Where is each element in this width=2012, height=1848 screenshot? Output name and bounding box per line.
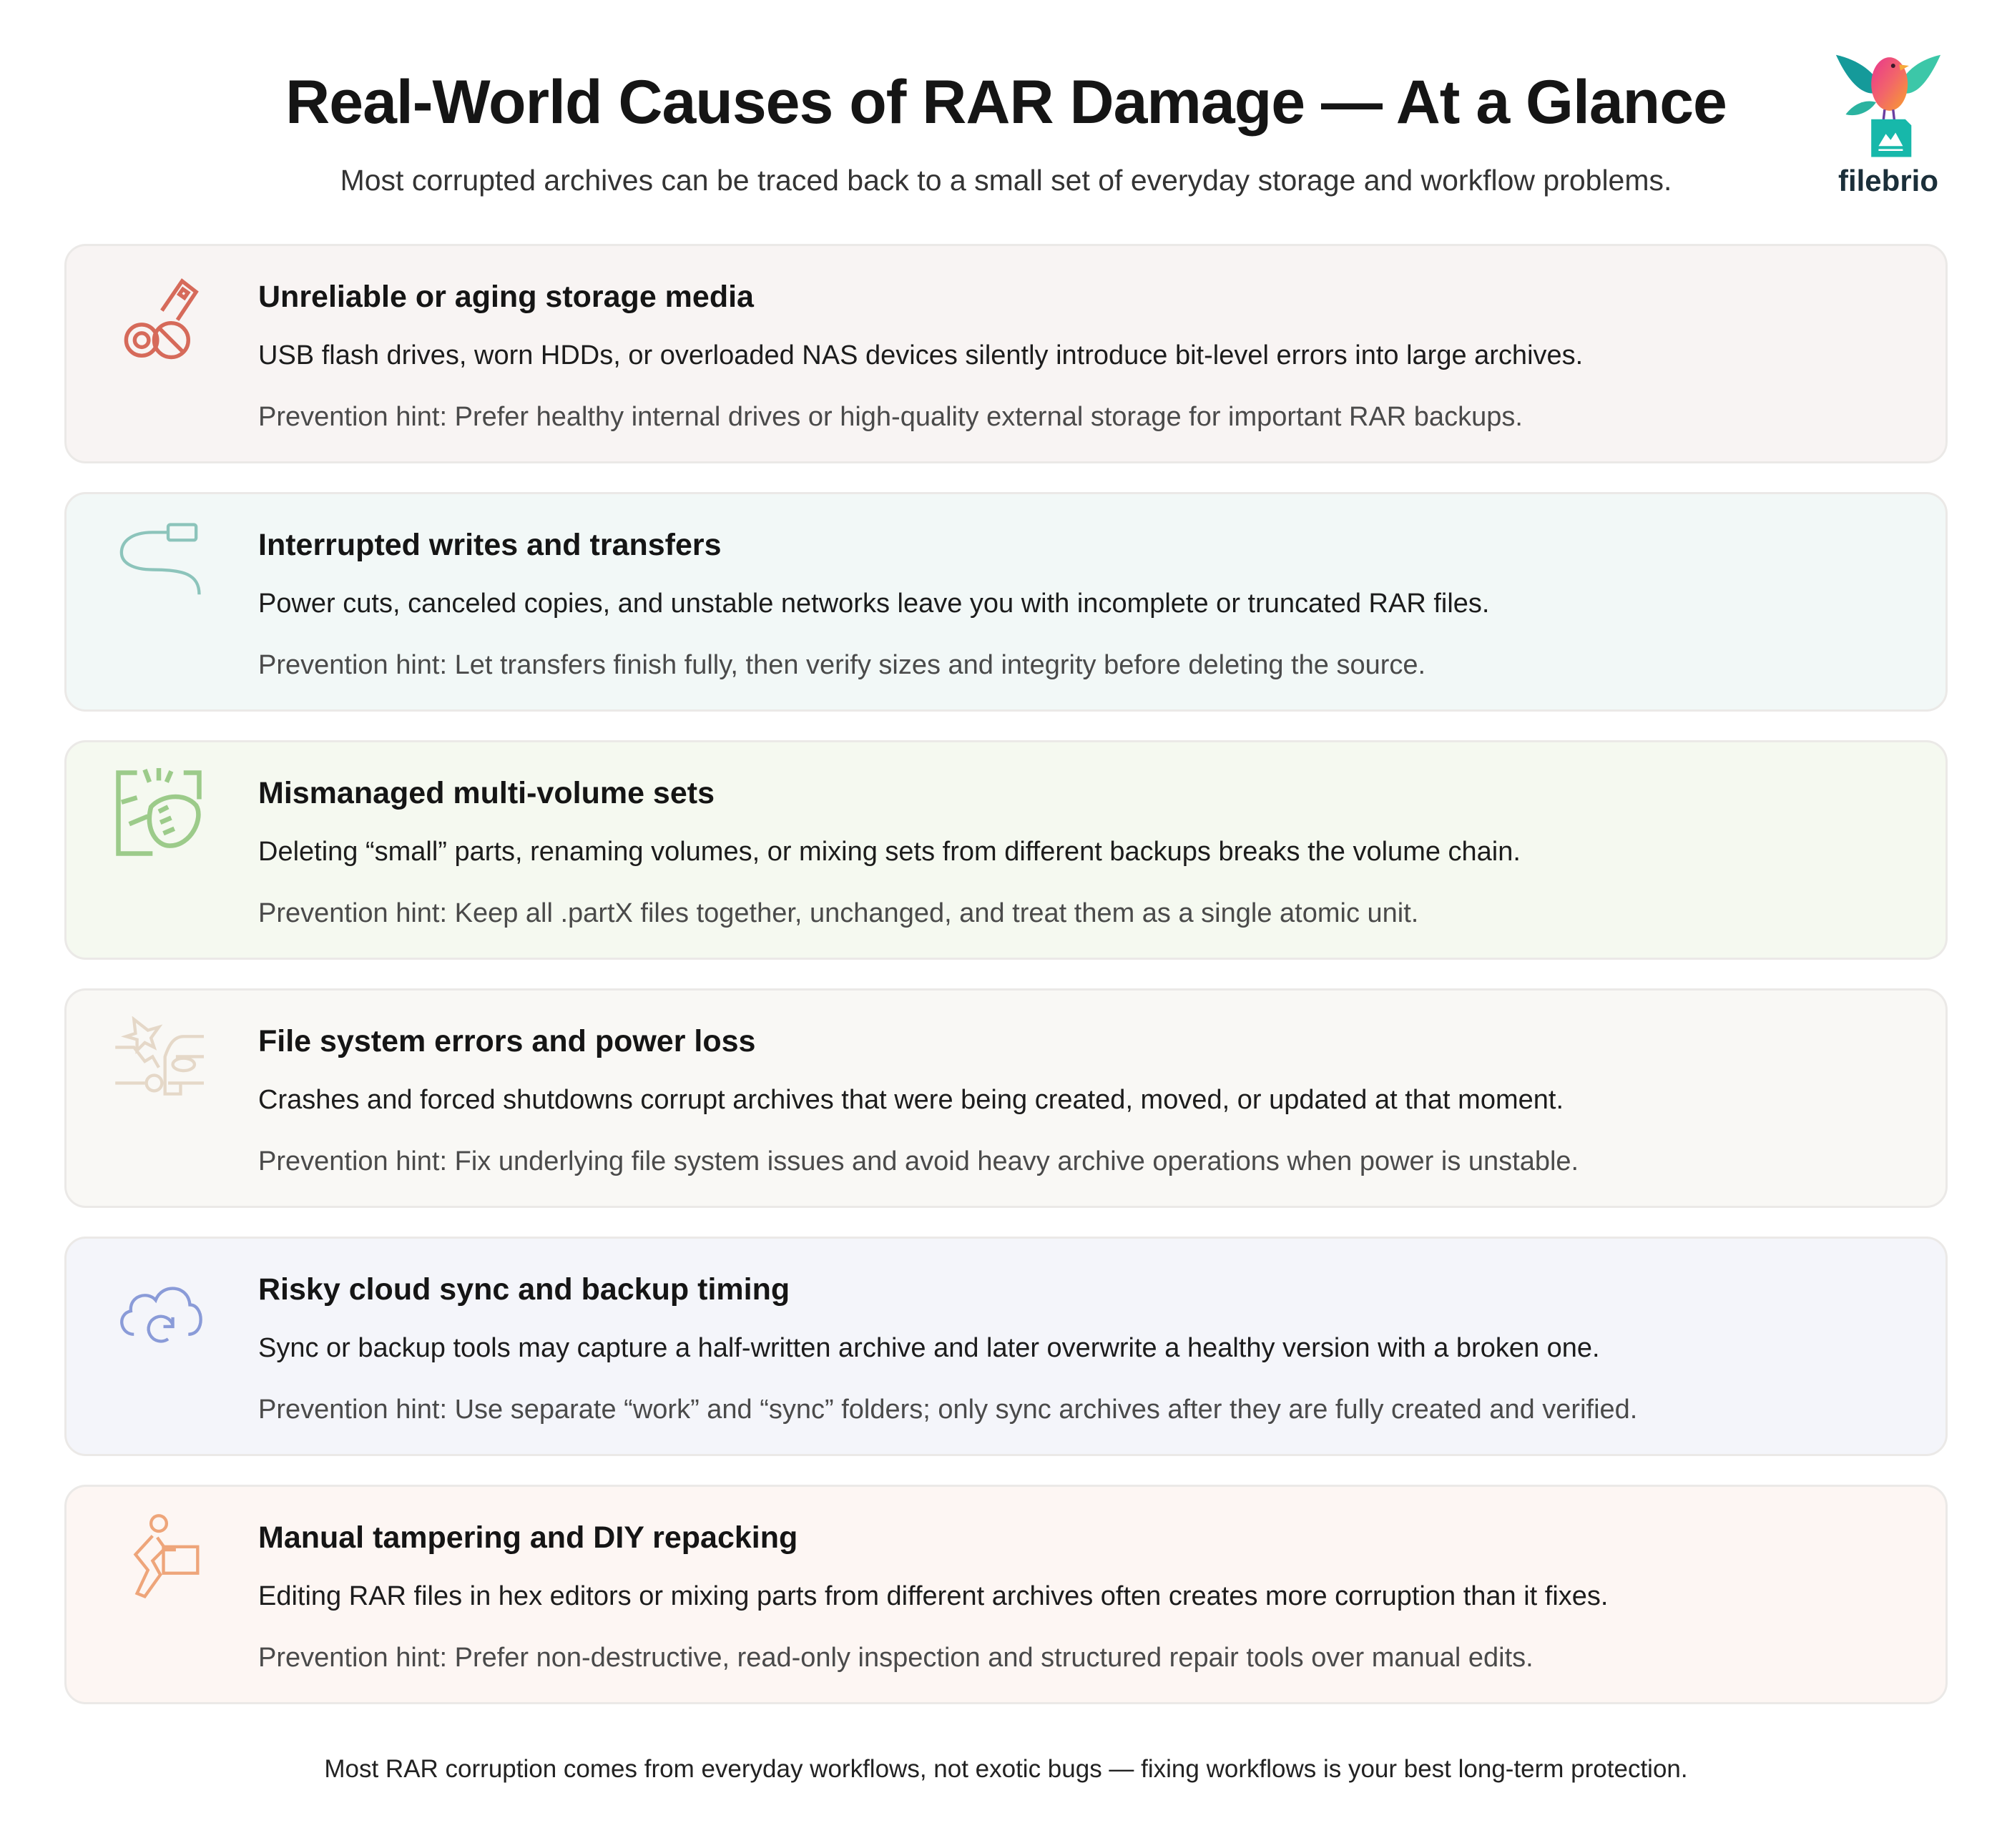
heading: Risky cloud sync and backup timing [258,1272,790,1307]
heading: File system errors and power loss [258,1024,755,1058]
icon: crash [115,1016,204,1096]
panel: cloud sync [64,1237,1948,1456]
text: Sync or backup tools may capture a half-written archive and later overwrite a healthy version with a broken one. [258,1333,1600,1363]
icon: broken chain box [116,768,202,856]
panel: interrupted writes [64,492,1948,712]
footer note: Most RAR corruption comes from everyday workflows, not exotic bugs — fixing workflows is your best long-term protection. [324,1755,1688,1783]
heading: Mismanaged multi-volume sets [258,776,715,810]
icon: cable [120,523,201,595]
heading: Interrupted writes and transfers [258,528,722,562]
subtitle: Most corrupted archives can be traced back to a small set of everyday storage and workflow problems. [340,164,1672,197]
panel: file system errors [64,988,1948,1208]
hint: Prevention hint: Keep all .partX files together, unchanged, and treat them as a single atomic unit. [258,898,1418,928]
hint: Prevention hint: Use separate “work” and “sync” folders; only sync archives after they are fully created and verified. [258,1395,1637,1425]
text: Crashes and forced shutdowns corrupt archives that were being created, moved, or updated at that moment. [258,1085,1564,1115]
hint: Prevention hint: Let transfers finish fully, then verify sizes and integrity before deleting the source. [258,650,1425,680]
hint: Prevention hint: Fix underlying file system issues and avoid heavy archive operations when power is unstable. [258,1146,1579,1176]
hint: Prevention hint: Prefer healthy internal drives or high-quality external storage for important RAR backups. [258,402,1523,432]
heading: Manual tampering and DIY repacking [258,1520,798,1555]
text: Power cuts, canceled copies, and unstable networks leave you with incomplete or truncated RAR files. [258,589,1489,619]
logo: filebrio: filebrio [1838,164,1938,197]
logo: filebrio [1835,54,1940,197]
icon: person repacking [133,1514,199,1598]
text: Editing RAR files in hex editors or mixing parts from different archives often creates more corruption than it fixes. [258,1581,1608,1611]
hint: Prevention hint: Prefer non-destructive, read-only inspection and structured repair tools over manual edits. [258,1643,1533,1673]
panel: unreliable storage media [64,244,1948,463]
text: USB flash drives, worn HDDs, or overloaded NAS devices silently introduce bit-level errors into large archives. [258,340,1583,370]
title: Real-World Causes of RAR Damage — At a Glance [285,68,1727,137]
panel: manual tampering [64,1485,1948,1704]
heading: Unreliable or aging storage media [258,280,754,314]
icon: cloud sync [120,1287,202,1343]
text: Deleting “small” parts, renaming volumes, or mixing sets from different backups breaks the volume chain. [258,837,1521,867]
panel: multi-volume sets [64,740,1948,960]
icon: usb drive [124,278,199,359]
